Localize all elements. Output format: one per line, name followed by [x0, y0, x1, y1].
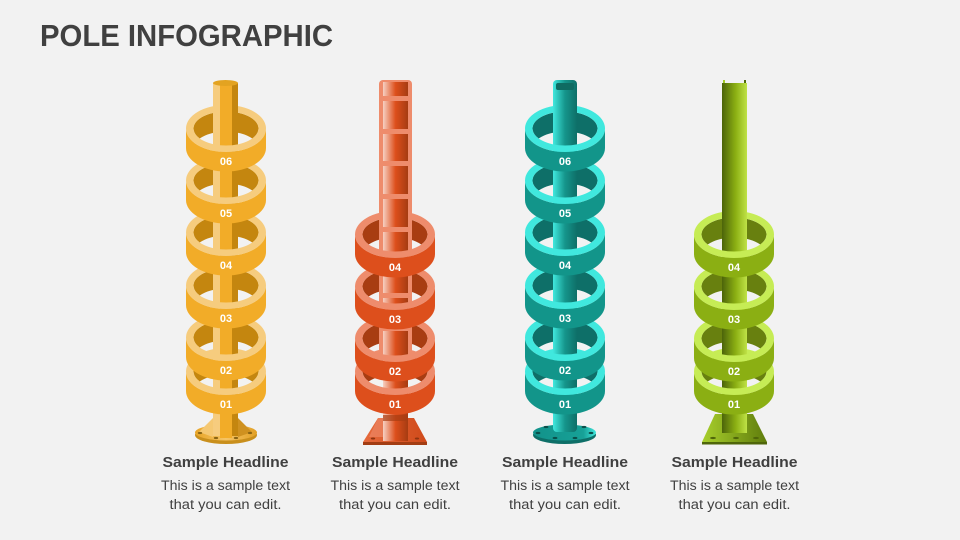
ring 04 — [694, 234, 774, 278]
ring 03: 03 — [728, 314, 740, 326]
caption 2: that you can edit. — [339, 497, 451, 512]
round base plate yellow — [195, 418, 257, 444]
caption 1: that you can edit. — [170, 497, 282, 512]
ring 05 — [186, 180, 266, 224]
ring 04 — [186, 232, 266, 276]
ring 01 — [355, 372, 435, 414]
ring 02: 02 — [559, 365, 571, 377]
caption 4: that you can edit. — [678, 497, 790, 512]
pole shaft yellow — [213, 80, 238, 438]
ring 03: 03 — [559, 313, 571, 325]
ring 02: 02 — [728, 366, 740, 378]
ring backs yellow — [186, 105, 266, 382]
ring 05: 05 — [220, 208, 232, 220]
ring 05: 05 — [559, 208, 571, 220]
caption 3: This is a sample text — [500, 478, 630, 493]
ring 06: 06 — [559, 156, 571, 168]
ring 04 — [525, 232, 605, 276]
round base plate teal — [533, 424, 596, 444]
caption 3 — [500, 455, 630, 512]
caption 1 — [161, 455, 290, 512]
pole column 1: yellow — [186, 80, 266, 444]
ring backs green — [694, 211, 774, 382]
ring 04: 04 — [559, 260, 572, 272]
ring 03: 03 — [389, 314, 401, 326]
caption 2: Sample Headline — [332, 455, 458, 471]
ring 03 — [525, 286, 605, 328]
ring 01 — [694, 372, 774, 414]
ring 02 — [355, 338, 435, 382]
ring 02 — [525, 338, 605, 380]
pole shaft green — [722, 80, 747, 433]
square base plate green — [702, 414, 767, 444]
ring 03 — [355, 286, 435, 330]
pole shaft teal — [553, 80, 577, 432]
ring backs orange — [355, 211, 435, 382]
square base plate orange — [363, 418, 427, 445]
caption 4: Sample Headline — [672, 455, 798, 471]
caption 1: Sample Headline — [162, 455, 288, 471]
ring 06 — [186, 128, 266, 172]
caption 4 — [670, 455, 799, 512]
ring 01: 01 — [728, 399, 740, 411]
ring 03 — [186, 286, 266, 328]
caption 3: Sample Headline — [502, 455, 628, 471]
ladder pole orange — [379, 80, 412, 441]
ring 06: 06 — [220, 156, 232, 168]
pole column 3: teal — [525, 80, 605, 444]
ring 03 — [694, 286, 774, 330]
ring 04: 04 — [728, 262, 741, 274]
pole column 4: green — [694, 80, 774, 444]
ring 01: 01 — [220, 399, 232, 411]
caption 1: This is a sample text — [161, 478, 290, 493]
ring 01: 01 — [559, 399, 571, 411]
pole column 2: orange — [355, 80, 435, 445]
title: POLE INFOGRAPHIC — [40, 18, 333, 53]
ring 04 — [355, 234, 435, 278]
caption 3: that you can edit. — [509, 497, 621, 512]
ring 04: 04 — [389, 262, 402, 274]
caption 2: This is a sample text — [330, 478, 460, 493]
caption 2 — [330, 455, 460, 512]
ring 01 — [186, 372, 266, 414]
ring 01 — [525, 372, 605, 414]
ring 02 — [694, 338, 774, 382]
ring 02: 02 — [389, 366, 401, 378]
ring 01: 01 — [389, 399, 401, 411]
ring 03: 03 — [220, 313, 232, 325]
ring 06 — [525, 128, 605, 172]
ring 05 — [525, 180, 605, 224]
ring 02 — [186, 338, 266, 380]
caption 4: This is a sample text — [670, 478, 799, 493]
ring 04: 04 — [220, 260, 233, 272]
ring 02: 02 — [220, 365, 232, 377]
ring backs teal — [525, 105, 605, 382]
